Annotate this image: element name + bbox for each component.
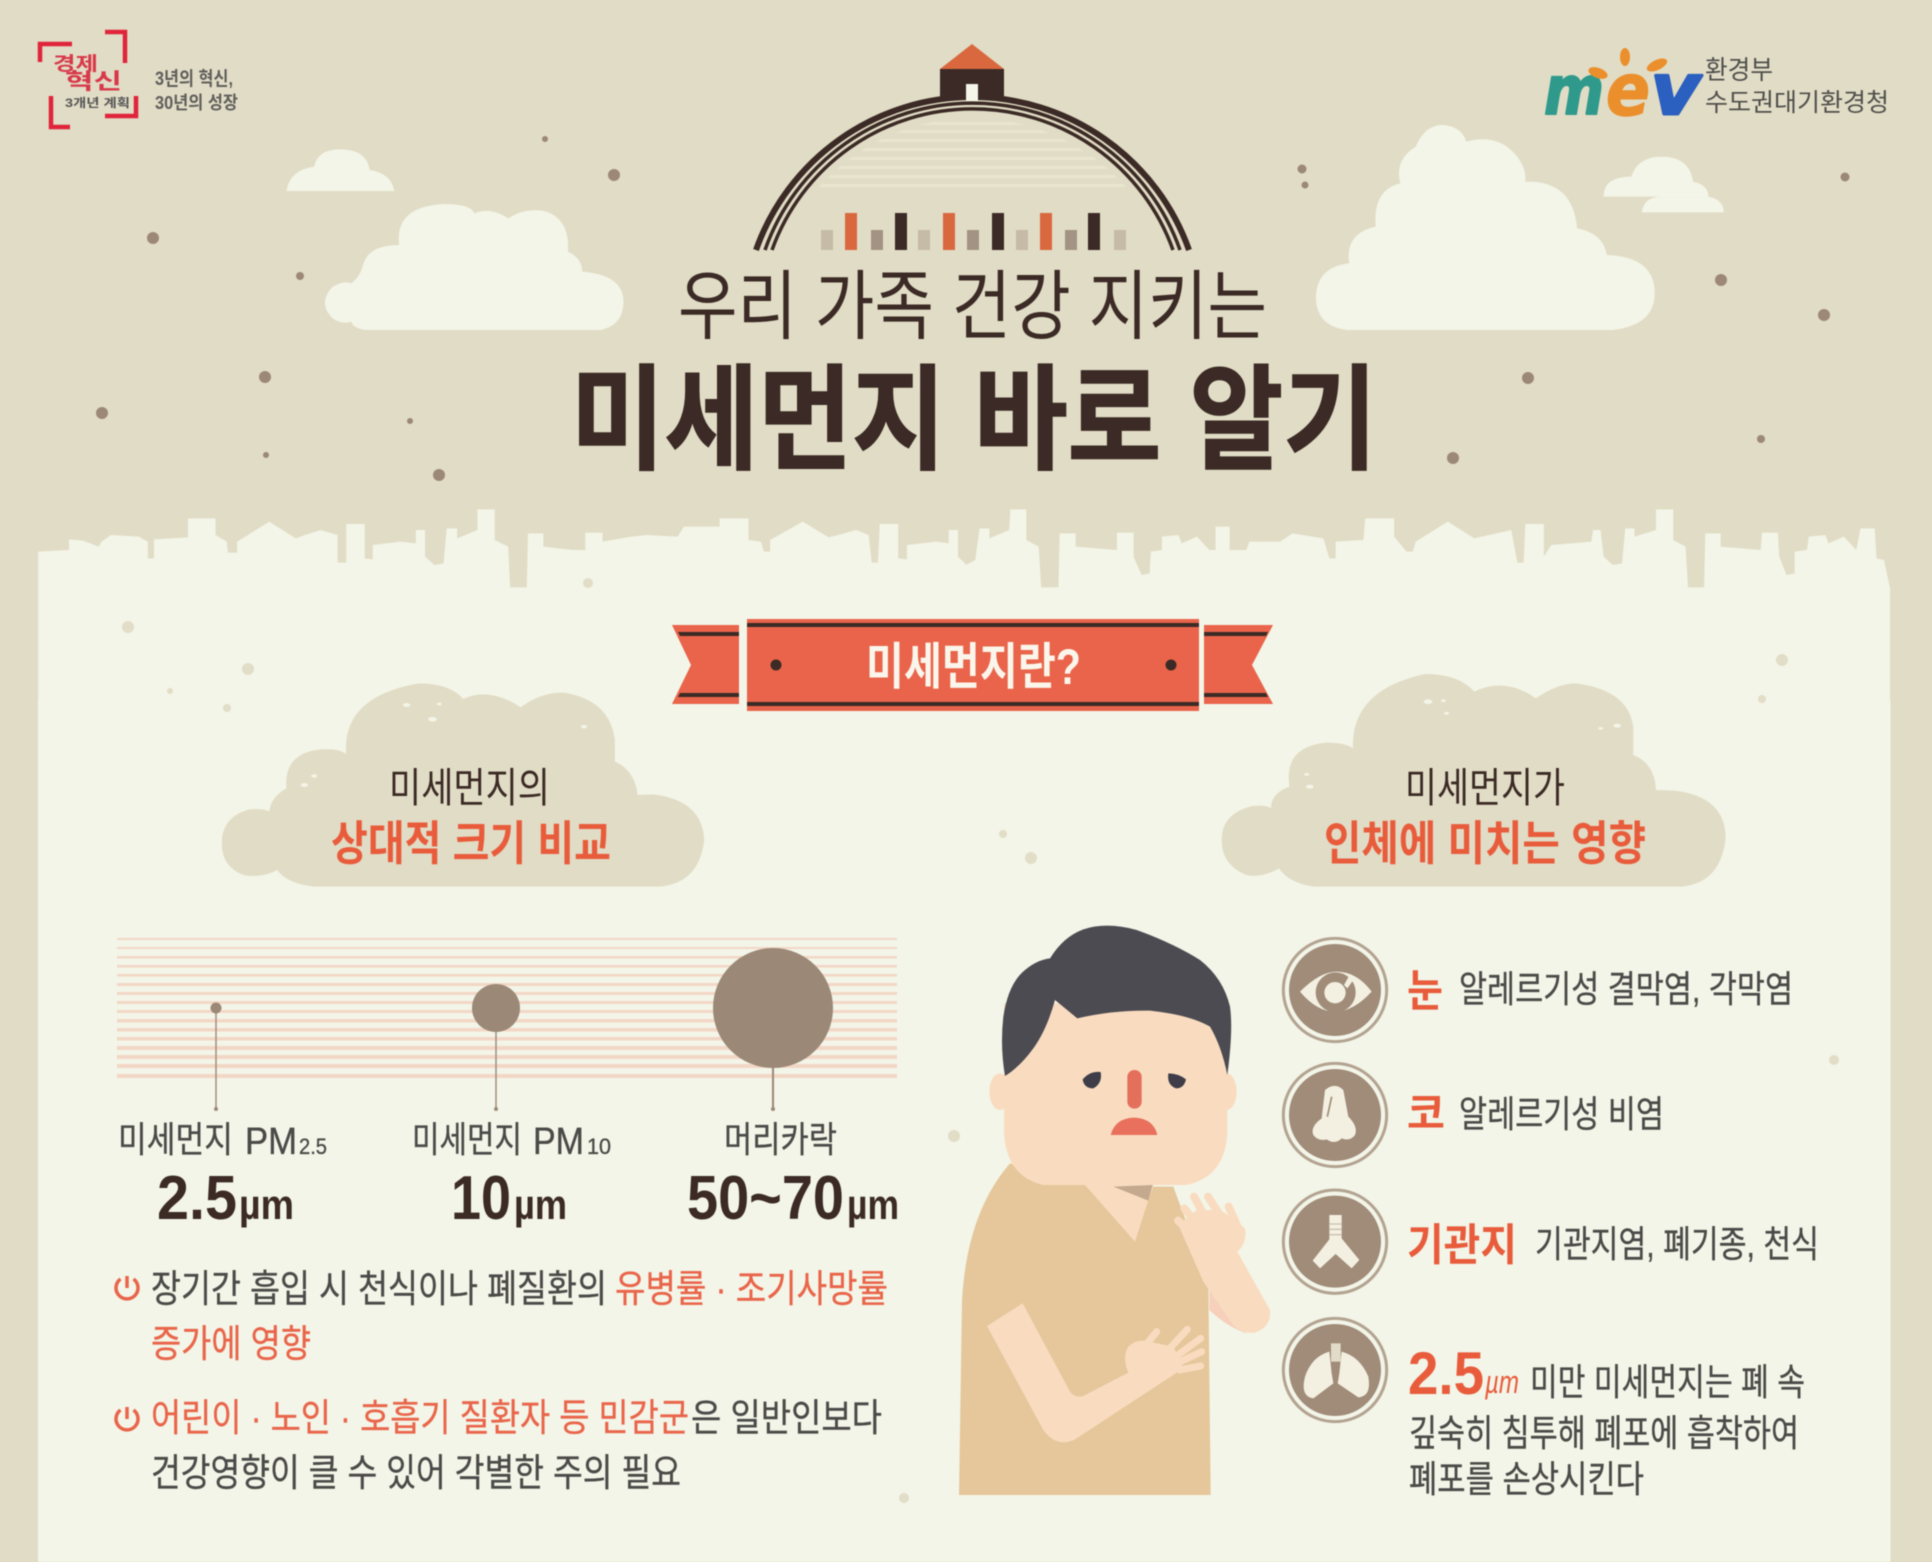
effect: bronchi: 기관지염, 폐기종, 천식: [1535, 1224, 1819, 1265]
title: [571, 265, 1377, 485]
logo: Ministry of Environment metropolitan air office: 수도권대기환경청: [1705, 89, 1889, 117]
illustration: coughing person: [959, 926, 1270, 1495]
size label: PM2.5: µm: [239, 1181, 294, 1228]
face: [1004, 1003, 1227, 1185]
cloud heading: health effects: 인체에 미치는 영향: [1324, 817, 1646, 870]
hair: [1002, 926, 1231, 1076]
decorative clouds, top right: [1316, 125, 1724, 330]
logo: Ministry of Environment metropolitan air office: e: [1606, 48, 1650, 132]
logo: economic innovation plan: [40, 32, 238, 127]
effect: eye: [1407, 967, 1793, 1016]
note 1: 증가에 영향: [151, 1324, 311, 1366]
size label: PM2.5: PM: [245, 1121, 297, 1163]
size label: hair: 머리카락: [724, 1119, 837, 1160]
dust dots on beige sky: [96, 136, 1850, 481]
effect: bronchi: [1407, 1221, 1819, 1270]
effect: lungs: 폐포를 손상시킨다: [1409, 1459, 1644, 1500]
icon: lungs: [1283, 1318, 1387, 1422]
cloud heading: relative size: 상대적 크기 비교: [331, 817, 611, 870]
eyes: [1083, 1072, 1186, 1088]
size label: PM10: µm: [514, 1181, 567, 1228]
effect: lungs: 깊숙히 침투해 폐포에 흡착하여: [1409, 1413, 1799, 1454]
icon: house on dome: [940, 44, 1004, 101]
panel with city skyline: [38, 509, 1890, 1562]
size label: PM10: 10: [451, 1164, 511, 1233]
size label: hair: [687, 1119, 899, 1233]
note 1: 유병률 · 조기사망률: [615, 1269, 888, 1311]
far arm with raised hand: [1178, 1197, 1270, 1333]
title: 우리 가족 건강 지키는: [678, 265, 1267, 350]
icon: trachea: [1283, 1190, 1387, 1293]
size comparison chart: [117, 938, 897, 1111]
logo: Ministry of Environment metropolitan air office: v: [1651, 49, 1703, 131]
icon: eye: [1283, 938, 1387, 1042]
size label: hair: µm: [847, 1181, 899, 1228]
effect: nose: 코: [1407, 1090, 1445, 1137]
effect: lungs: µm: [1484, 1364, 1519, 1400]
nose: [1127, 1070, 1142, 1109]
effect: lungs: 미만 미세먼지는 폐 속: [1530, 1362, 1805, 1403]
size label: PM10: PM: [533, 1121, 584, 1163]
logo: economic innovation plan: 혁신: [65, 69, 122, 94]
cloud heading: health effects: 미세먼지가: [1405, 765, 1565, 811]
hair: [713, 948, 833, 1111]
neck shadow: [1113, 1185, 1153, 1201]
size label: PM2.5: 미세먼지: [118, 1119, 233, 1160]
icon: nose: [1283, 1063, 1387, 1167]
logo: Ministry of Environment metropolitan air office: m: [1544, 52, 1604, 131]
cloud heading: health effects: [1222, 674, 1726, 887]
effect: bronchi: 기관지: [1407, 1221, 1517, 1270]
PM10 particle: [472, 984, 520, 1111]
size label: PM2.5: 2.5: [299, 1134, 327, 1159]
logo: economic innovation plan: 경제: [53, 53, 98, 75]
note 1: [116, 1269, 888, 1366]
shirt: [959, 1163, 1211, 1495]
neck opening: [1085, 1185, 1154, 1242]
logo: economic innovation plan: 3개년 계획: [65, 96, 130, 110]
size label: hair: 50~70: [687, 1164, 844, 1233]
effect: lungs: [1408, 1340, 1805, 1500]
logo: Ministry of Environment metropolitan air office: 환경부: [1705, 55, 1773, 85]
note 2: 어린이 · 노인 · 호흡기 질환자 등 민감군: [151, 1398, 689, 1440]
ears: [989, 1073, 1237, 1110]
pale dust dots on panel: [122, 578, 1839, 1503]
cloud heading: relative size: 미세먼지의: [389, 765, 550, 811]
ribbon heading: 미세먼지란?: [866, 639, 1081, 695]
logo: Ministry of Environment metropolitan air office: [1544, 48, 1889, 132]
mouth: [1111, 1118, 1157, 1135]
cloud heading: relative size: [222, 683, 704, 887]
note 2: 건강영향이 클 수 있어 각별한 주의 필요: [151, 1453, 681, 1495]
size label: PM10: [412, 1119, 611, 1233]
effect: nose: [1407, 1090, 1664, 1137]
decorative clouds, top left: [286, 149, 623, 330]
bar strip under dome: [821, 213, 1126, 250]
PM2.5 particle: [210, 1002, 222, 1111]
note 2: 은 일반인보다: [691, 1398, 882, 1440]
note 1: 장기간 흡입 시 천식이나 폐질환의: [151, 1269, 607, 1311]
near arm with hand on chest: [987, 1303, 1202, 1442]
logo: economic innovation plan: 30년의 성장: [155, 93, 238, 113]
dome with house: [750, 44, 1200, 250]
ribbon heading: [672, 619, 1273, 711]
effect: lungs: 2.5: [1408, 1340, 1484, 1407]
effect: nose: 알레르기성 비염: [1459, 1094, 1664, 1135]
note 2: [116, 1398, 882, 1495]
logo: economic innovation plan: 3년의 혁신,: [155, 68, 233, 90]
effect: eye: 눈: [1407, 967, 1443, 1016]
title: 미세먼지 바로 알기: [571, 358, 1377, 485]
size label: PM10: 미세먼지: [412, 1119, 522, 1160]
effect: eye: 알레르기성 결막염, 각막염: [1459, 969, 1793, 1010]
size label: PM10: 10: [587, 1134, 611, 1159]
size label: PM2.5: [118, 1119, 327, 1233]
size label: PM2.5: 2.5: [157, 1164, 237, 1233]
